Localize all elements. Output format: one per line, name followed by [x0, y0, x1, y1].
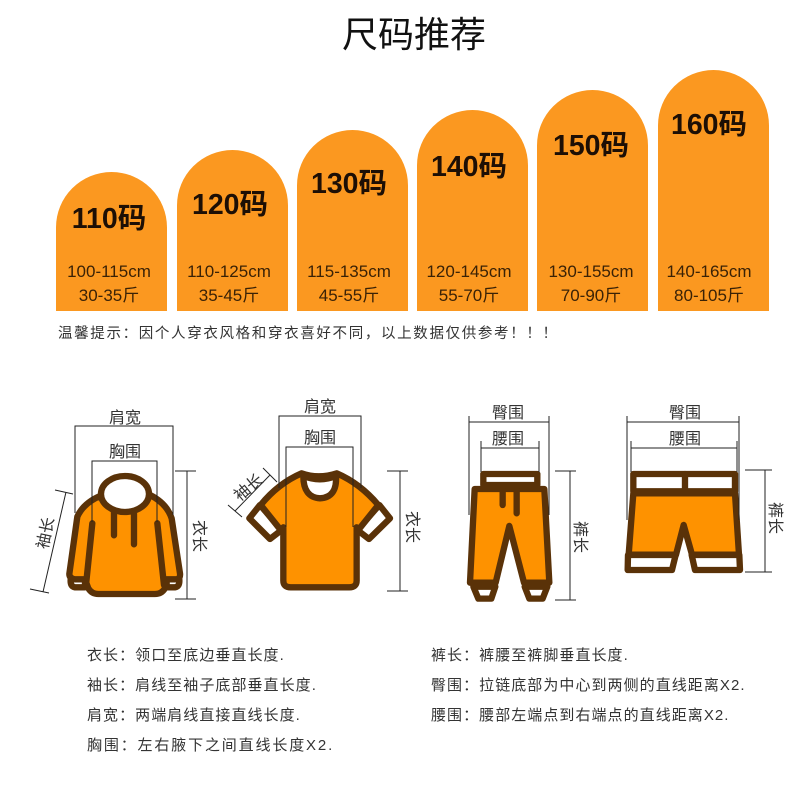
label: waist: 腰围 — [492, 430, 524, 448]
label: waist: 腰围 — [669, 430, 701, 448]
panel: size 160: 80-105斤 — [674, 286, 744, 305]
measurement lines — [627, 416, 772, 572]
label: hip: 臀围 — [669, 404, 701, 422]
icon: t-shirt — [249, 473, 390, 587]
legend: trousers measurements: 臀围：拉链底部为中心到两侧的直线距离X2. — [431, 677, 746, 694]
panel: size 110: 100-115cm — [67, 262, 151, 281]
diagram: shorts — [627, 404, 784, 572]
diagram: trousers — [469, 404, 589, 600]
legend: tops measurements: 袖长：肩线至袖子底部垂直长度. — [87, 677, 317, 694]
diagram: hoodie — [30, 409, 208, 599]
icon: trousers — [470, 474, 549, 599]
note text: 温馨提示：因个人穿衣风格和穿衣喜好不同，以上数据仅供参考！！！ — [58, 325, 559, 342]
panel: size 130: 115-135cm — [307, 262, 391, 281]
panel: size 120: 35-45斤 — [199, 286, 259, 305]
icon: shorts — [628, 474, 740, 570]
label: chest: 胸围 — [304, 429, 336, 447]
legend: tops measurements: 胸围：左右腋下之间直线长度X2. — [87, 737, 334, 754]
label: trouser length: 裤长 — [571, 521, 589, 553]
panel: size 120: 110-125cm — [187, 262, 271, 281]
panel: size 150: 130-155cm — [548, 262, 634, 281]
panel: size 140: 120-145cm — [426, 262, 512, 281]
measurement lines — [469, 416, 576, 600]
measurement lines — [228, 416, 408, 591]
label: garment length: 衣长 — [190, 520, 208, 552]
measurement lines — [30, 426, 196, 599]
panel: size 130: 45-55斤 — [319, 286, 379, 305]
legend: tops measurements: 肩宽：两端肩线直接直线长度. — [87, 707, 301, 724]
panel: size 140: 140码 — [431, 151, 507, 183]
panel: size 110 — [56, 172, 167, 311]
panel: size 130: 130码 — [311, 168, 387, 200]
diagram: t-shirt — [228, 398, 421, 591]
label: shoulder width: 肩宽 — [109, 409, 141, 427]
label: garment length: 衣长 — [403, 511, 421, 543]
panel: size 140: 55-70斤 — [439, 286, 499, 305]
label: shorts length: 裤长 — [766, 502, 784, 534]
panel: size 160: 160码 — [671, 109, 747, 141]
legend: trousers measurements: 裤长：裤腰至裤脚垂直长度. — [431, 647, 629, 664]
legend: trousers measurements: 腰围：腰部左端点到右端点的直线距离X2. — [431, 707, 730, 724]
legend: trousers measurements — [431, 647, 746, 724]
panel: size 150 — [537, 90, 648, 311]
panel: size 150: 70-90斤 — [561, 286, 621, 305]
legend: tops measurements — [87, 647, 334, 754]
legend: tops measurements: 衣长：领口至底边垂直长度. — [87, 647, 285, 664]
panel: size 110: 110码 — [72, 203, 146, 235]
label: sleeve length: 袖长 — [231, 471, 267, 505]
panel: size 130 — [297, 130, 408, 311]
panel: size 160: 140-165cm — [666, 262, 752, 281]
label: sleeve length: 袖长 — [34, 516, 58, 551]
panel: size 140 — [417, 110, 528, 311]
icon: hoodie — [69, 476, 180, 594]
label: hip: 臀围 — [492, 404, 524, 422]
panel: size 110: 30-35斤 — [79, 286, 139, 305]
panel: size 150: 150码 — [553, 130, 629, 162]
label: shoulder width: 肩宽 — [304, 398, 336, 416]
panel: size 120 — [177, 150, 288, 311]
panel: size 160 — [658, 70, 769, 311]
label: chest: 胸围 — [109, 443, 141, 461]
title: 尺码推荐 — [342, 14, 486, 55]
panel: size 120: 120码 — [192, 189, 268, 221]
